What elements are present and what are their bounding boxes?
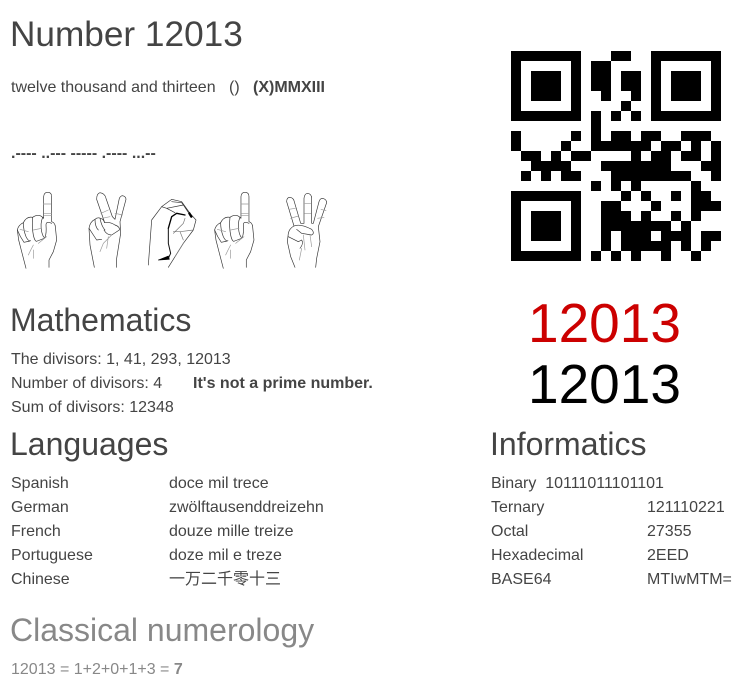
panel: languages table: zwölftausenddreizehn bbox=[169, 499, 324, 516]
QR code bbox=[511, 51, 721, 261]
panel: languages table bbox=[11, 475, 324, 588]
panel: informatics table: 121110221 bbox=[647, 499, 725, 516]
number in words and roman numeral: () bbox=[229, 79, 240, 96]
heading: informatics: Informatics bbox=[490, 426, 646, 462]
panel: informatics table: Hexadecimal bbox=[491, 547, 583, 564]
number in words and roman numeral: (X)MMXIII bbox=[253, 79, 325, 96]
panel: languages table: French bbox=[11, 523, 61, 540]
panel: informatics table: 27355 bbox=[647, 523, 692, 540]
text: numerology sum: 12013 = 1+2+0+1+3 = 7 bbox=[11, 661, 183, 678]
number in red: 12013 bbox=[528, 292, 681, 354]
panel: languages table: douze mille treize bbox=[169, 523, 294, 540]
panel: informatics table: BASE64 bbox=[491, 571, 551, 588]
panel: languages table: 一万二千零十三 bbox=[169, 571, 281, 588]
panel: languages table: Chinese bbox=[11, 571, 70, 588]
morse code: .---- ..--- ----- .---- ...-- bbox=[11, 145, 156, 162]
panel: languages table: German bbox=[11, 499, 69, 516]
panel: informatics table bbox=[491, 475, 732, 588]
title: Number 12013 bbox=[10, 15, 243, 54]
panel: informatics table: 2EED bbox=[647, 547, 689, 564]
text: not prime: It's not a prime number. bbox=[193, 375, 373, 392]
icon: sign language hands bbox=[17, 192, 327, 269]
number in words and roman numeral: twelve thousand and thirteen bbox=[11, 79, 216, 96]
text: divisors: The divisors: 1, 41, 293, 12013 bbox=[11, 351, 231, 368]
number in words and roman numeral bbox=[11, 79, 325, 96]
panel: languages table: Spanish bbox=[11, 475, 69, 492]
text: sum of divisors: Sum of divisors: 12348 bbox=[11, 399, 174, 416]
heading: languages: Languages bbox=[10, 426, 168, 462]
panel: languages table: doce mil trece bbox=[169, 475, 269, 492]
panel: languages table: Portuguese bbox=[11, 547, 93, 564]
panel: informatics table: Binary 10111011101101 bbox=[491, 475, 664, 492]
panel: informatics table: Octal bbox=[491, 523, 528, 540]
panel: languages table: doze mil e treze bbox=[169, 547, 282, 564]
text: number of divisors: Number of divisors: 4 bbox=[11, 375, 162, 392]
number in black: 12013 bbox=[528, 353, 681, 415]
heading: classical numerology: Classical numerology bbox=[10, 612, 314, 648]
heading: mathematics: Mathematics bbox=[10, 302, 191, 338]
panel: informatics table: MTIwMTM= bbox=[647, 571, 732, 588]
panel: informatics table: Ternary bbox=[491, 499, 544, 516]
